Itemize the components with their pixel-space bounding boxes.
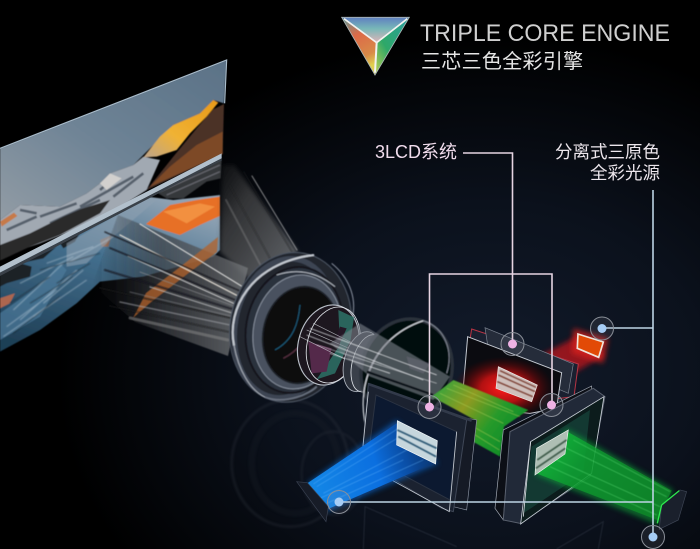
- LCD image: green: [535, 430, 568, 475]
- callout lines: light source: [339, 190, 653, 537]
- label: 3LCD system: 3LCD系统: [375, 142, 457, 162]
- blue light source block: [297, 482, 328, 522]
- light beams from lens to screen: [92, 165, 298, 356]
- lower fan: [92, 215, 248, 356]
- green light source block: [657, 490, 687, 529]
- label: separated primary light source: [555, 142, 660, 183]
- callout lines: 3LCD: [430, 153, 552, 407]
- barrel rays: [307, 323, 450, 400]
- orange reflection: [146, 197, 220, 235]
- callout marker: green source: [642, 526, 664, 548]
- assembly reflection: [363, 507, 603, 549]
- brown cliff: [147, 104, 224, 190]
- label: separated primary light source: 全彩光源: [590, 163, 660, 183]
- projection lens: [218, 243, 390, 412]
- rear relay ring: [348, 307, 465, 433]
- shoreline: [0, 153, 222, 273]
- front lens element: [289, 298, 368, 392]
- panel: red LCD: [453, 328, 578, 420]
- callout marker: right LCD: [540, 394, 563, 416]
- streak lines: [100, 172, 297, 340]
- panel: blue LCD: [362, 383, 477, 512]
- water streaks: [3, 237, 113, 337]
- callout marker: blue source: [328, 490, 350, 514]
- projected mountain image: [0, 60, 227, 352]
- rear lens element: [337, 328, 386, 396]
- centre green-yellow light beam: [432, 380, 528, 457]
- label: separated primary light source: 分离式三原色: [555, 142, 660, 162]
- reflected dark strip: [155, 159, 222, 198]
- outer barrel: [218, 243, 363, 412]
- panel: green LCD: [495, 386, 605, 524]
- upper fan: [220, 165, 298, 282]
- LCD image: blue: [397, 421, 437, 464]
- blue light beam: [307, 420, 438, 512]
- lens reflection on floor: [232, 400, 365, 527]
- title: Chinese: 三芯三色全彩引擎: [421, 50, 583, 73]
- LCD image: red: [496, 367, 537, 402]
- red light source: [572, 328, 608, 363]
- golden peak: [143, 100, 218, 157]
- red light beam: [500, 335, 605, 388]
- LCD prism assembly: [297, 307, 687, 549]
- green light beam: [535, 428, 673, 525]
- screen edge: [0, 60, 227, 148]
- callout marker: top LCD: [501, 332, 524, 356]
- title: English: TRIPLE CORE ENGINE: [420, 20, 670, 47]
- callout marker: left LCD: [418, 396, 441, 418]
- sky: [0, 60, 227, 220]
- snowy mountains: [0, 157, 160, 257]
- water: [0, 195, 220, 352]
- orange streak: [133, 237, 218, 318]
- callout marker: red source: [590, 317, 614, 340]
- logo: tri-colour triangle: [342, 17, 409, 75]
